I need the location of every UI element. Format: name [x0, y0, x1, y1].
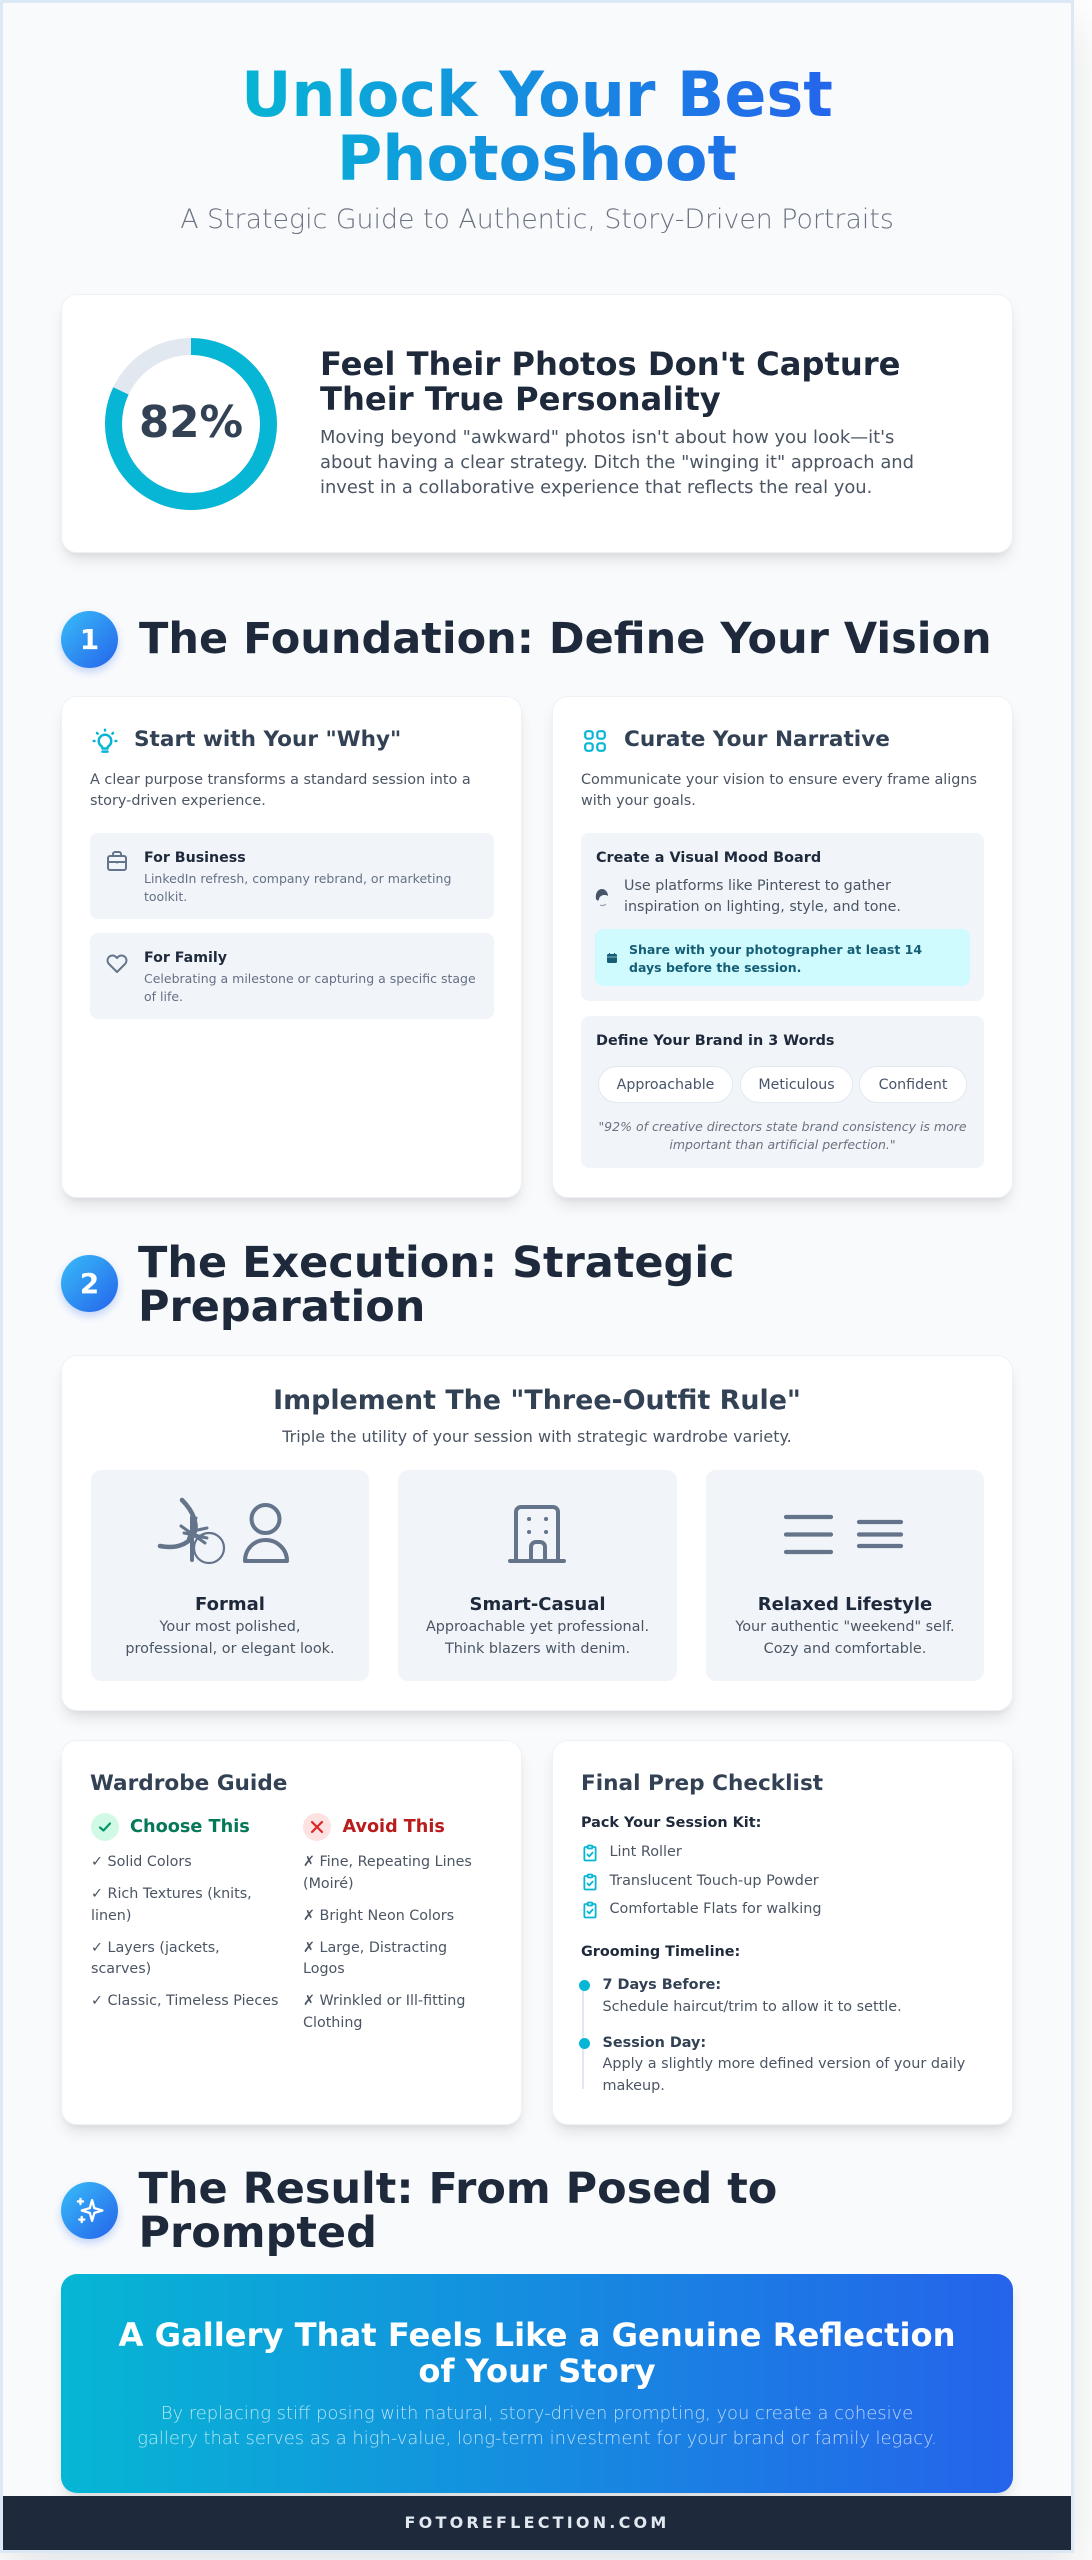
section 1 heading: The Foundation: Define Your Vision [139, 614, 992, 664]
panel: start with why [61, 696, 522, 1198]
icon: clipboard check [583, 1844, 597, 1862]
item text: Lint Roller [610, 1844, 682, 1860]
panel: result banner [61, 2274, 1013, 2493]
title: Photoshoot [337, 122, 737, 194]
quote: important than artificial perfection." [669, 1136, 896, 1152]
callout text: Share with your photographer at least 14 [629, 942, 922, 957]
sub-panel: for family [90, 933, 494, 1019]
icon: calendar [607, 953, 617, 963]
banner text: By replacing stiff posing with natural, story-driven prompting, you create a cohesive [161, 2403, 913, 2424]
panel heading: Wardrobe Guide [90, 1771, 287, 1796]
item text: Comfortable Flats for walking [610, 1901, 822, 1917]
description: Your most polished, [160, 1619, 300, 1635]
timeline step 2: Session Day: [602, 2034, 706, 2050]
section 3 heading: Prompted [138, 2208, 377, 2258]
title: Unlock Your Best [241, 58, 833, 130]
footer [3, 2496, 1071, 2550]
section 2 badge [61, 1255, 118, 1312]
callout text: days before the session. [629, 960, 801, 975]
card heading: Start with Your "Why" [134, 727, 401, 752]
footer: FOTOREFLECTION.COM [405, 2513, 669, 2532]
hero heading: Their True Personality [320, 380, 721, 418]
description: Cozy and comfortable. [764, 1641, 926, 1657]
card text: with your goals. [581, 793, 696, 809]
timeline [579, 1977, 965, 2094]
banner text [137, 2403, 937, 2449]
avoid list: ✗ Bright Neon Colors [303, 1908, 454, 1924]
description [125, 1619, 335, 1657]
panel: final prep checklist [552, 1740, 1013, 2125]
panel: three outfit rule [61, 1355, 1013, 1711]
avoid badge [303, 1813, 331, 1841]
icon: building [508, 1505, 566, 1563]
sub-panel: for business [90, 833, 494, 919]
timeline dot 2 [579, 2038, 590, 2049]
outfit: relaxed lifestyle [706, 1470, 984, 1681]
icon: clipboard check [583, 1902, 597, 1918]
word tag: confident: Confident [879, 1077, 947, 1093]
icon: light bulb [92, 728, 118, 753]
avoid list: ✗ Wrinkled or Ill-fitting [303, 1993, 465, 2009]
sub-panel: for family: Celebrating a milestone or capturing a specific stage [144, 970, 476, 986]
timeline rail [582, 1981, 584, 2089]
avoid heading: Avoid This [342, 1817, 445, 1837]
item text: Translucent Touch-up Powder [610, 1872, 819, 1888]
label and text: For Family [144, 950, 227, 966]
banner text: gallery that serves as a high-value, long-term investment for your brand or family legacy. [137, 2428, 937, 2449]
panel: hero statistic [61, 294, 1013, 553]
mood board text: inspiration on lighting, style, and tone. [624, 899, 901, 915]
statistic value: 82% [139, 398, 243, 448]
hero text: about having a clear strategy. Ditch the "winging it" approach and [320, 452, 914, 473]
choose list: ✓ Classic, Timeless Pieces [91, 1993, 278, 2009]
kit heading: Pack Your Session Kit: [581, 1815, 761, 1831]
icon: check [98, 1822, 112, 1832]
label: Relaxed Lifestyle [758, 1594, 932, 1614]
choose list: scarves) [91, 1961, 151, 1977]
timeline step 2: makeup. [602, 2078, 665, 2094]
subtitle: A Strategic Guide to Authentic, Story-Driven Portraits [180, 204, 894, 235]
description [426, 1619, 649, 1657]
avoid list: (Moiré) [303, 1876, 354, 1892]
sub-panel: for family: of life. [144, 988, 183, 1004]
avoid list: ✗ Fine, Repeating Lines [303, 1854, 472, 1870]
card text: Communicate your vision to ensure every frame aligns [581, 772, 977, 788]
word tag: meticulous [740, 1066, 853, 1103]
description: Think blazers with denim. [445, 1641, 630, 1657]
timeline step 1 [602, 1977, 902, 2015]
icon: briefcase [107, 851, 127, 871]
section 2 heading: The Execution: Strategic [138, 1238, 735, 1288]
section 2 badge: 2 [80, 1267, 99, 1300]
card text [90, 772, 471, 809]
timeline step 1: Schedule haircut/trim to allow it to settle. [602, 1999, 902, 2015]
label: Formal [195, 1594, 265, 1614]
callout text [629, 942, 922, 975]
description: Approachable yet professional. [426, 1619, 649, 1635]
icon: menu lines [784, 1514, 904, 1554]
label: Smart-Casual [469, 1594, 606, 1614]
word tag: confident [859, 1066, 967, 1103]
avoid list [303, 1854, 472, 2031]
icon: sparkles [76, 2198, 104, 2224]
card text: A clear purpose transforms a standard session into a [90, 772, 471, 788]
mood board text: Use platforms like Pinterest to gather [624, 878, 891, 894]
panel: wardrobe guide [61, 1740, 522, 2125]
checklist item: powder [583, 1872, 819, 1890]
section 3 heading: The Result: From Posed to [138, 2164, 777, 2214]
section 1 badge: 1 [80, 623, 99, 656]
sub-panel: brand words [581, 1016, 984, 1168]
quote: "92% of creative directors state brand consistency is more [598, 1118, 967, 1134]
icon: layout grid [584, 730, 606, 752]
word tag: meticulous: Meticulous [758, 1077, 835, 1093]
choose badge [91, 1813, 119, 1841]
sub-panel: for business: LinkedIn refresh, company rebrand, or marketing [144, 870, 451, 886]
callout: share timing [595, 929, 970, 986]
checklist item: flats [583, 1901, 822, 1918]
timeline heading: Grooming Timeline: [581, 1944, 740, 1960]
sub-panel: for business: toolkit. [144, 888, 187, 904]
icon: clipboard check [583, 1874, 597, 1890]
choose list: linen) [91, 1908, 131, 1924]
panel: curate your narrative [552, 696, 1013, 1198]
description: professional, or elegant look. [125, 1641, 335, 1657]
banner heading: of Your Story [418, 2352, 656, 2390]
choose list: ✓ Rich Textures (knits, [91, 1886, 252, 1902]
icon: partial palette [596, 889, 608, 906]
checklist item: lint roller [583, 1844, 682, 1862]
section 2 heading: Preparation [138, 1282, 425, 1332]
panel subheading: Triple the utility of your session with strategic wardrobe variety. [282, 1427, 792, 1446]
word tag: approachable [598, 1066, 733, 1103]
title [227, 62, 847, 190]
card text: story-driven experience. [90, 793, 266, 809]
section 3 badge [61, 2182, 118, 2239]
timeline step 2: Apply a slightly more defined version of your daily [602, 2056, 965, 2072]
icon: bow tie and person [158, 1498, 289, 1564]
timeline dot 1 [579, 1980, 590, 1991]
icon: heart [106, 954, 128, 973]
section 3 heading [138, 2164, 777, 2258]
avoid list: ✗ Large, Distracting [303, 1940, 447, 1956]
sub-panel: mood board [581, 833, 984, 1001]
label and text: For Business [144, 850, 246, 866]
choose list: ✓ Solid Colors [91, 1854, 192, 1870]
choose list [91, 1854, 278, 2009]
section 1 badge [61, 611, 118, 668]
card heading: Curate Your Narrative [624, 727, 890, 752]
banner heading [118, 2316, 956, 2390]
timeline step 1: 7 Days Before: [602, 1977, 721, 1993]
quote [598, 1118, 967, 1152]
brand heading: Define Your Brand in 3 Words [596, 1033, 834, 1049]
choose heading: Choose This [130, 1817, 250, 1837]
card text [581, 772, 977, 809]
mood board text [624, 878, 901, 915]
outfit: smart casual [398, 1470, 677, 1681]
donut chart: 82% [105, 338, 277, 510]
hero heading [320, 344, 900, 418]
hero text: invest in a collaborative experience that reflects the real you. [320, 477, 872, 498]
icon: cross [310, 1820, 324, 1834]
panel heading: Implement The "Three-Outfit Rule" [273, 1385, 801, 1416]
hero text [320, 426, 914, 498]
avoid list: Clothing [303, 2015, 362, 2031]
avoid list: Logos [303, 1961, 345, 1977]
hero text: Moving beyond "awkward" photos isn't about how you look—it's [320, 426, 894, 448]
choose list: ✓ Layers (jackets, [91, 1940, 220, 1956]
word tag: approachable: Approachable [617, 1077, 714, 1093]
hero heading: Feel Their Photos Don't Capture [320, 344, 900, 382]
panel heading: Final Prep Checklist [581, 1771, 823, 1796]
timeline step 2 [602, 2034, 965, 2094]
description: Your authentic "weekend" self. [735, 1619, 955, 1635]
banner heading: A Gallery That Feels Like a Genuine Reflection [118, 2316, 956, 2354]
description [735, 1619, 955, 1657]
mood board heading: Create a Visual Mood Board [596, 850, 821, 866]
outfit: formal [91, 1470, 369, 1681]
section 2 heading [138, 1238, 735, 1332]
